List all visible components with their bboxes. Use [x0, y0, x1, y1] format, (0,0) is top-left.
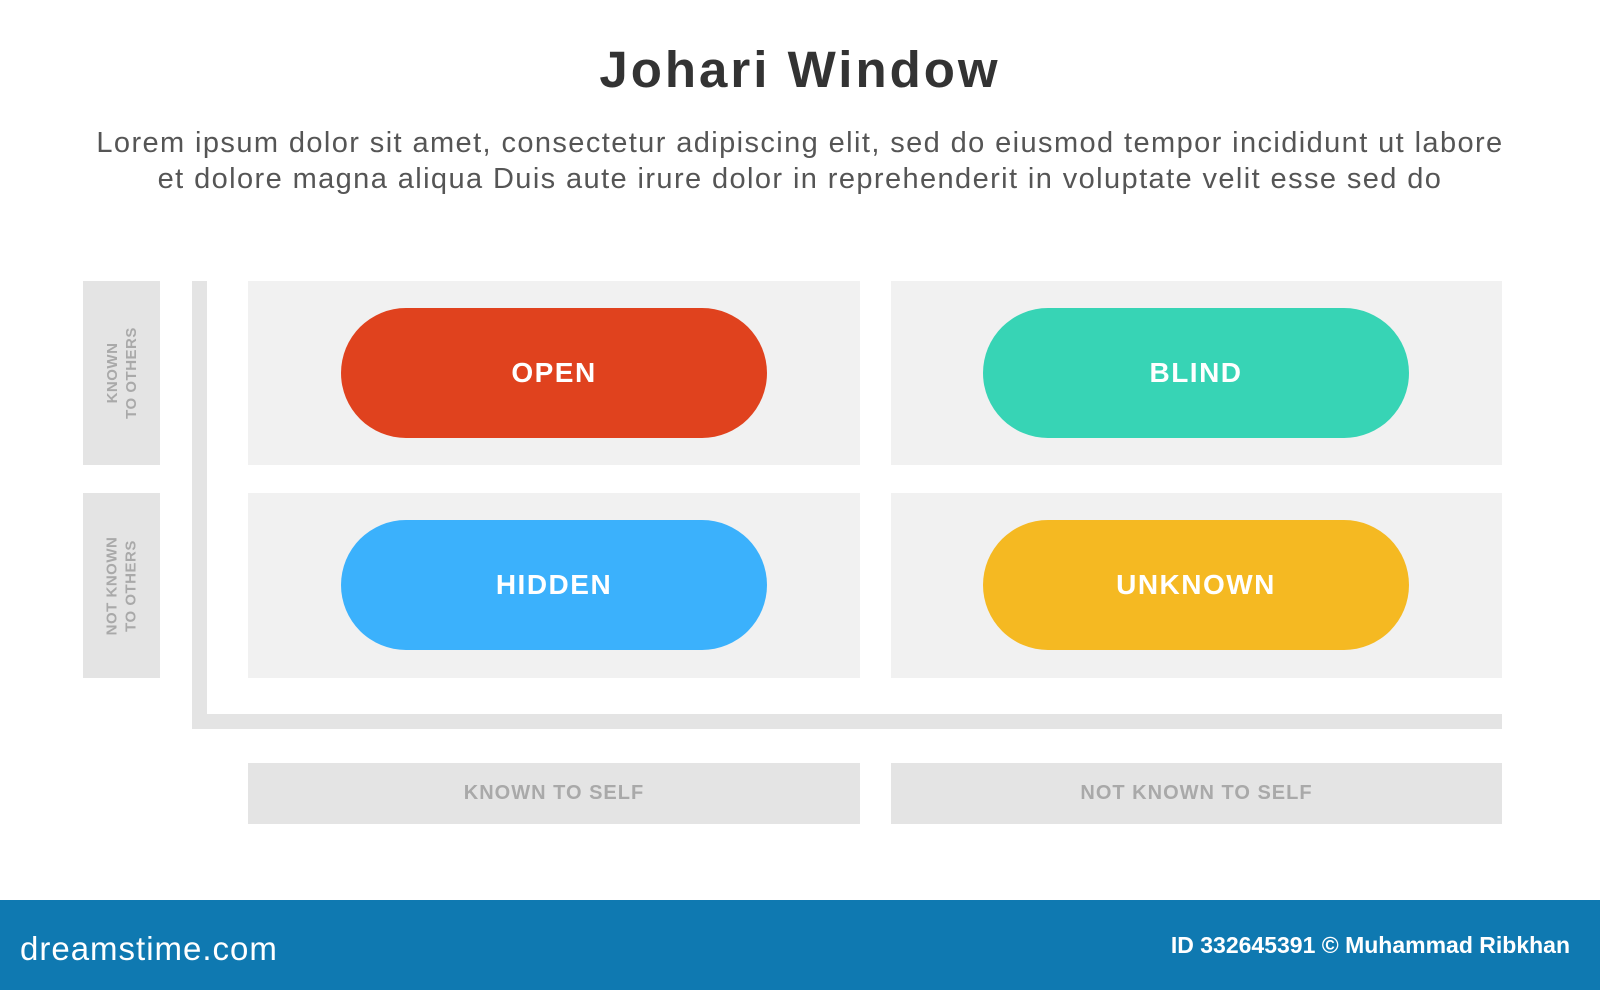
subtitle text: et dolore magna aliqua Duis aute irure dolor in reprehenderit in voluptate velit esse sed do — [158, 163, 1442, 195]
side label: not known to others: TO OTHERS — [122, 540, 140, 631]
subtitle text — [96, 127, 1504, 195]
footer credit: ID 332645391 © Muhammad Ribkhan — [1171, 932, 1570, 958]
bottom label: known to self: KNOWN TO SELF — [464, 782, 644, 804]
pill: unknown: UNKNOWN — [1116, 569, 1276, 600]
pill: hidden: HIDDEN — [496, 569, 612, 600]
pill: open — [341, 308, 767, 438]
bottom label: not known to self — [891, 763, 1502, 824]
panel: unknown — [891, 493, 1502, 678]
footer brand: dreamstime.com — [20, 930, 278, 967]
pill: open: OPEN — [511, 357, 597, 388]
panel: blind — [891, 281, 1502, 465]
side label: not known to others: NOT KNOWN — [104, 536, 120, 635]
bottom label: known to self — [248, 763, 860, 824]
side label: not known to others — [83, 493, 160, 678]
panel: hidden — [248, 493, 860, 678]
axis L-shape — [192, 281, 1502, 729]
bottom label: not known to self: NOT KNOWN TO SELF — [1080, 782, 1313, 804]
side label: known to others — [83, 281, 160, 465]
panel: open — [248, 281, 860, 465]
subtitle text: Lorem ipsum dolor sit amet, consectetur adipiscing elit, sed do eiusmod tempor incididunt ut labore — [96, 127, 1504, 159]
pill: hidden — [341, 520, 767, 650]
side label: known to others: TO OTHERS — [123, 327, 140, 419]
pill: blind — [983, 308, 1409, 438]
footer bar — [0, 900, 1600, 990]
pill: unknown — [983, 520, 1409, 650]
side label: known to others: KNOWN — [104, 343, 121, 403]
pill: blind: BLIND — [1149, 357, 1243, 388]
title: Johari Window — [599, 41, 1001, 98]
